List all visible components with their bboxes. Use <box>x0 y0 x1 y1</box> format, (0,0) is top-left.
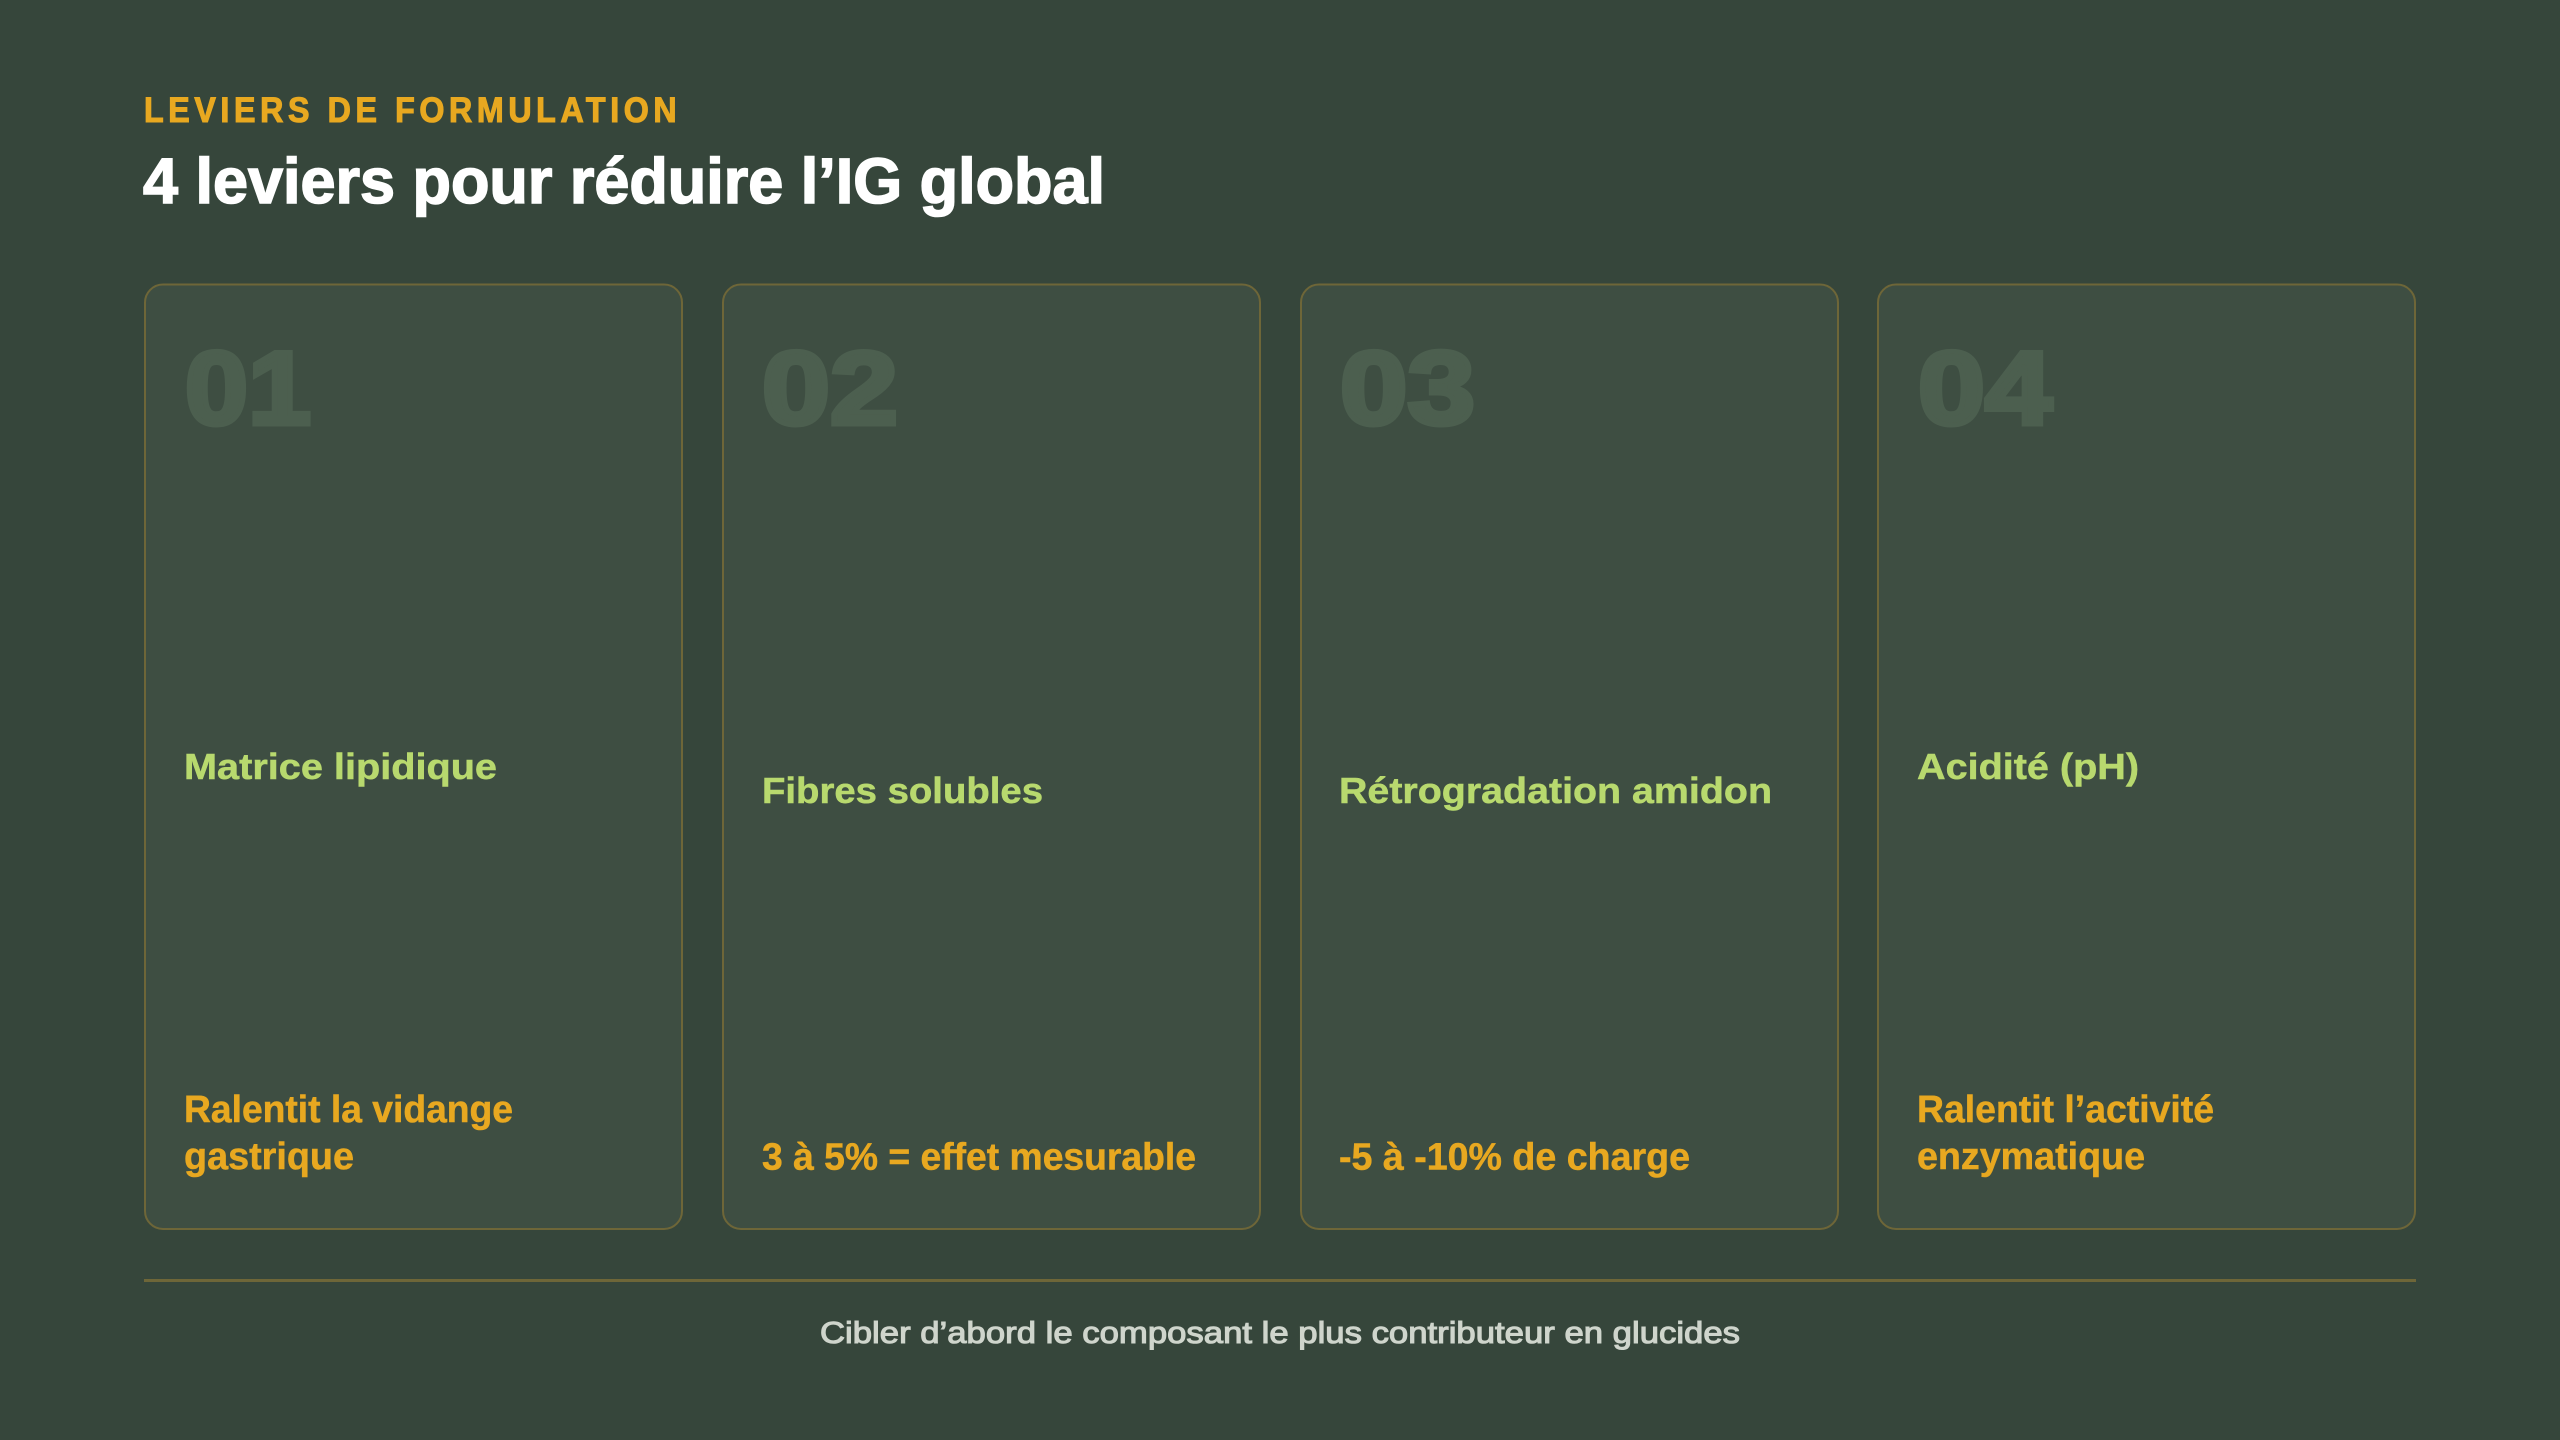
lever effect <box>1917 1089 2214 1178</box>
card number 03: 03 <box>1340 331 1475 447</box>
eyebrow label: LEVIERS DE FORMULATION <box>144 92 677 130</box>
panel: lever 01 <box>145 284 682 1229</box>
card number 02: 02 <box>762 331 898 447</box>
lever name: Fibres solubles <box>762 770 1043 811</box>
title: 4 leviers pour réduire l’IG global <box>143 145 1105 217</box>
panel: lever 03 <box>1301 284 1838 1229</box>
footer note: Cibler d’abord le composant le plus contributeur en glucides <box>820 1315 1740 1350</box>
lever name: Acidité (pH) <box>1917 746 2139 787</box>
lever effect: Ralentit la vidange <box>184 1089 513 1131</box>
header <box>143 92 1105 217</box>
panel: lever 02 <box>723 284 1260 1229</box>
lever effect: -5 à -10% de charge <box>1339 1136 1690 1178</box>
lever effect: enzymatique <box>1917 1136 2145 1178</box>
lever effect <box>184 1089 513 1178</box>
lever effect: Ralentit l’activité <box>1917 1089 2214 1131</box>
panel: lever 04 <box>1878 284 2415 1229</box>
card number 01: 01 <box>185 331 311 447</box>
lever effect: 3 à 5% = effet mesurable <box>762 1136 1196 1178</box>
lever name: Rétrogradation amidon <box>1339 770 1772 811</box>
lever effect: gastrique <box>184 1136 354 1178</box>
card number 04: 04 <box>1918 331 2052 447</box>
lever name: Matrice lipidique <box>184 746 497 787</box>
